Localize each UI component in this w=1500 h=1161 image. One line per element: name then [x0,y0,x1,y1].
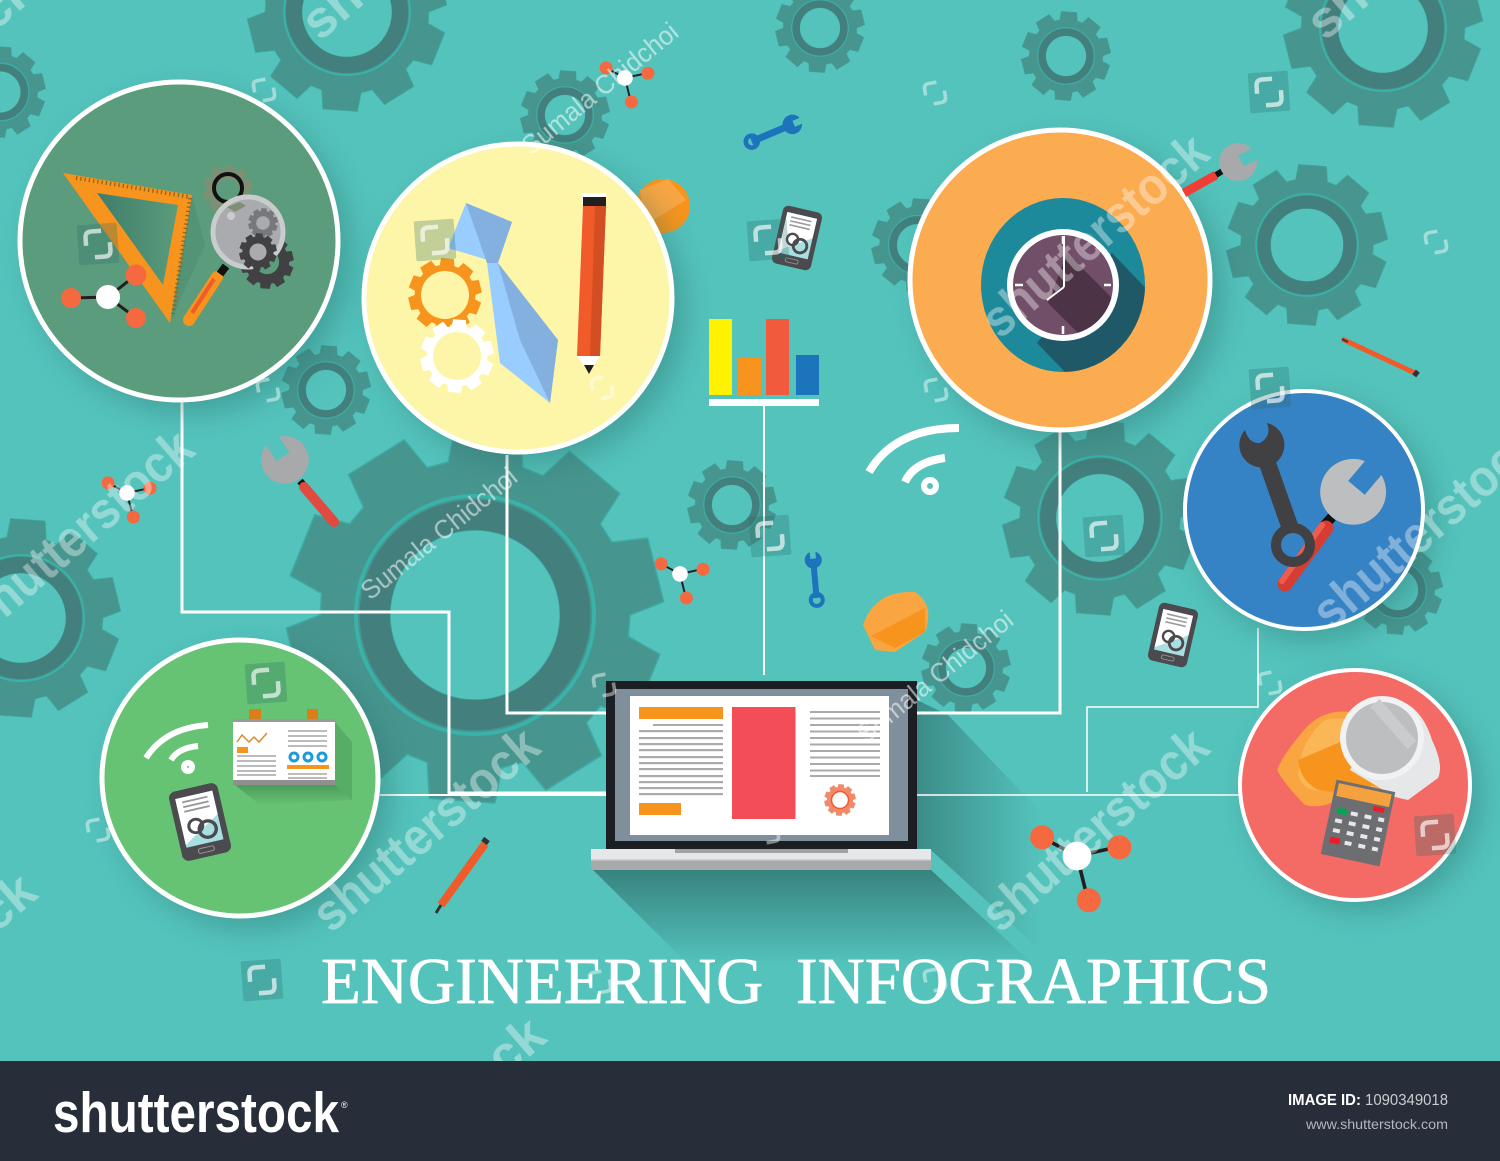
Sumala Chidchoi watermarks: Sumala Chidchoi [355,462,523,606]
bar chart [709,319,819,406]
icon: red pencil lower left [436,839,487,913]
icon: orange helmet centre [863,592,928,652]
icon: calculator [1321,780,1395,866]
icon: molecule lower right [1010,795,1136,917]
icon: grey spanner left [253,428,334,522]
icon: red pencil [577,193,606,374]
icon: molecule left [91,460,159,526]
icon: wifi signal small [146,725,208,771]
background gears [0,0,1483,803]
icon: molecule top centre [589,45,657,111]
icon: phone lower right [1147,602,1199,668]
icon: smartphone [168,782,232,862]
Sumala Chidchoi watermarks: Sumala Chidchoi [516,17,684,161]
image id: IMAGE ID: 1090349018 [1288,1092,1448,1109]
icon: clock [981,198,1160,372]
screen left text column [639,707,723,815]
icon: molecule middle [644,541,712,607]
icon: set square ruler [63,173,205,323]
icon: white hard hat [1340,696,1440,800]
icon: red pencil upper right [1342,339,1418,375]
screen gear [824,784,856,816]
laptop long shadow [593,700,1120,968]
Sumala Chidchoi watermarks: Sumala Chidchoi [851,605,1019,749]
footer logo: ® [341,1100,348,1110]
screen right text column [810,712,880,776]
connector lines [182,400,1258,795]
site url: www.shutterstock.com [1305,1116,1448,1132]
icon: grey spanner upper right [1184,137,1262,193]
laptop [591,681,931,870]
panel: safety helmet circle [1240,670,1481,911]
small orange helmet behind yellow circle [636,179,690,233]
panel: wrench circle [1185,391,1434,640]
icon: blue wrench top [742,112,805,153]
shutterstock watermarks: shutterstock [970,716,1220,943]
screen red block [732,707,796,819]
footer bar [0,1061,1500,1161]
footer logo: shutterstock [53,1081,339,1145]
icon: orange and white gears [408,258,494,393]
small watermark badges [77,71,1456,1001]
icon: phone near chart [771,205,823,271]
icon: grey spanner [1282,447,1398,584]
laptop base [591,849,931,870]
icon: magnifier with gears [189,165,294,320]
icon: large wifi signal [869,428,959,492]
icon: molecule [61,264,146,328]
icon: dashboard board [233,709,352,805]
panel: measuring tools circle [20,82,351,413]
panel: connectivity circle [102,640,391,929]
shutterstock watermarks: ck [475,1005,557,1087]
Sumala Chidchoi watermarks [355,17,1019,749]
icon: orange helmet [1277,711,1400,806]
icon: blue wrench vertical [804,551,826,607]
panel: tie and pencil circle [364,144,685,465]
title: ENGINEERING INFOGRAPHICS [321,945,1271,1018]
shutterstock watermarks: shutterstock [301,716,551,943]
shutterstock watermarks: shutterstock [970,122,1220,349]
panel: clock circle [910,130,1223,443]
icon: dark wrench [1239,423,1310,562]
icon: necktie [448,203,558,403]
